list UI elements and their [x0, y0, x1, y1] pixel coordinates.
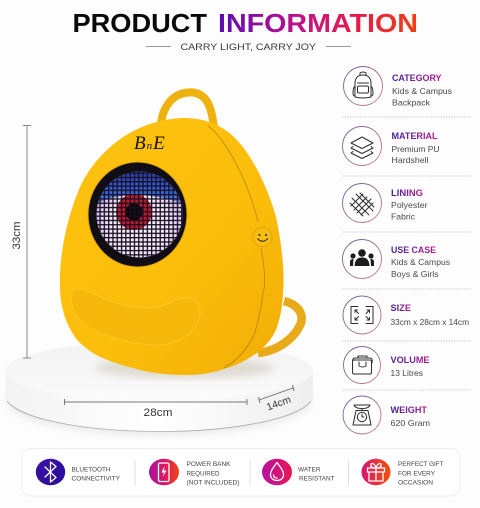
- spec: use case: [342, 240, 450, 279]
- subtitle: CARRY LIGHT, CARRY JOY: [180, 42, 316, 52]
- spec: weight: 620 Gram: [390, 418, 430, 428]
- depth dimension: [258, 385, 294, 413]
- spec: lining: [342, 184, 428, 222]
- spec: category: CATEGORY: [392, 73, 442, 83]
- feature: power bank: (NOT INCLUDED): [186, 480, 240, 486]
- feature: gift: OCCASION: [398, 480, 433, 486]
- feature card: [22, 448, 460, 496]
- spec: material: Hardshell: [392, 155, 429, 165]
- icon: group of people: [350, 249, 374, 266]
- title accent word: INFORMATION: [218, 8, 418, 38]
- spec: use case: USE CASE: [391, 245, 436, 255]
- feature: gift: FOR EVERY: [398, 470, 436, 478]
- back strap: [258, 301, 302, 353]
- feature: gift: PERFECT GIFT: [398, 461, 444, 468]
- spec: size: 33cm x 28cm x 14cm: [390, 317, 469, 327]
- icon: woven fabric: [350, 193, 374, 216]
- smiley zipper pull: [253, 228, 272, 246]
- front pocket: [71, 288, 200, 345]
- feature: bluetooth: CONNECTIVITY: [72, 476, 121, 482]
- spec: weight: WEIGHT: [390, 405, 428, 415]
- feature: power bank: [149, 459, 240, 486]
- feature: water resistant: WATER: [298, 466, 321, 474]
- title: PRODUCT: [72, 8, 207, 38]
- spec: use case: Kids & Campus: [391, 257, 450, 267]
- backpack: [60, 92, 302, 375]
- spec: size: SIZE: [390, 303, 411, 313]
- icon: box bag: [352, 356, 372, 374]
- icon: layers: [351, 137, 373, 158]
- feature: gift: [362, 459, 444, 486]
- brand logo: BnE: [134, 133, 165, 154]
- spec: use case: Boys & Girls: [391, 269, 438, 279]
- backpack body: [60, 118, 284, 375]
- spec: lining: Polyester: [391, 200, 428, 210]
- width dimension: 28cm: [144, 407, 172, 419]
- spec: material: Premium PU: [392, 144, 440, 154]
- dashed dividers: [342, 117, 471, 390]
- display platform: [5, 341, 313, 435]
- spec: category: Backpack: [392, 98, 431, 108]
- icon: expand arrows: [351, 306, 373, 324]
- top handle: [161, 92, 214, 128]
- feature: water resistant: [262, 459, 335, 485]
- LED eye display: [88, 162, 187, 267]
- height dimension: 33cm: [11, 222, 23, 250]
- depth dimension: 14cm: [265, 394, 293, 413]
- spec: weight: [343, 396, 430, 434]
- feature: water resistant: RESISTANT: [299, 476, 335, 482]
- spec: volume: VOLUME: [390, 355, 430, 365]
- spec: lining: LINING: [391, 188, 423, 198]
- icon: kitchen scale: [353, 405, 371, 425]
- height dimension: [11, 126, 31, 358]
- spec: category: [344, 66, 452, 108]
- feature: bluetooth: [36, 459, 121, 485]
- feature: power bank: REQUIRED: [186, 470, 220, 478]
- spec: volume: [344, 346, 430, 384]
- zipper: [208, 126, 265, 368]
- spec: material: [342, 126, 440, 166]
- spec: category: Kids & Campus: [392, 86, 452, 96]
- icon: backpack: [353, 72, 373, 98]
- spec: volume: 13 Litres: [390, 368, 423, 378]
- spec: size: [343, 296, 469, 334]
- width dimension: [64, 399, 247, 419]
- feature: power bank: POWER BANK: [186, 461, 231, 468]
- spec: material: MATERIAL: [392, 131, 438, 141]
- feature: bluetooth: BLUETOOTH: [72, 466, 111, 474]
- spec: lining: Fabric: [391, 212, 416, 222]
